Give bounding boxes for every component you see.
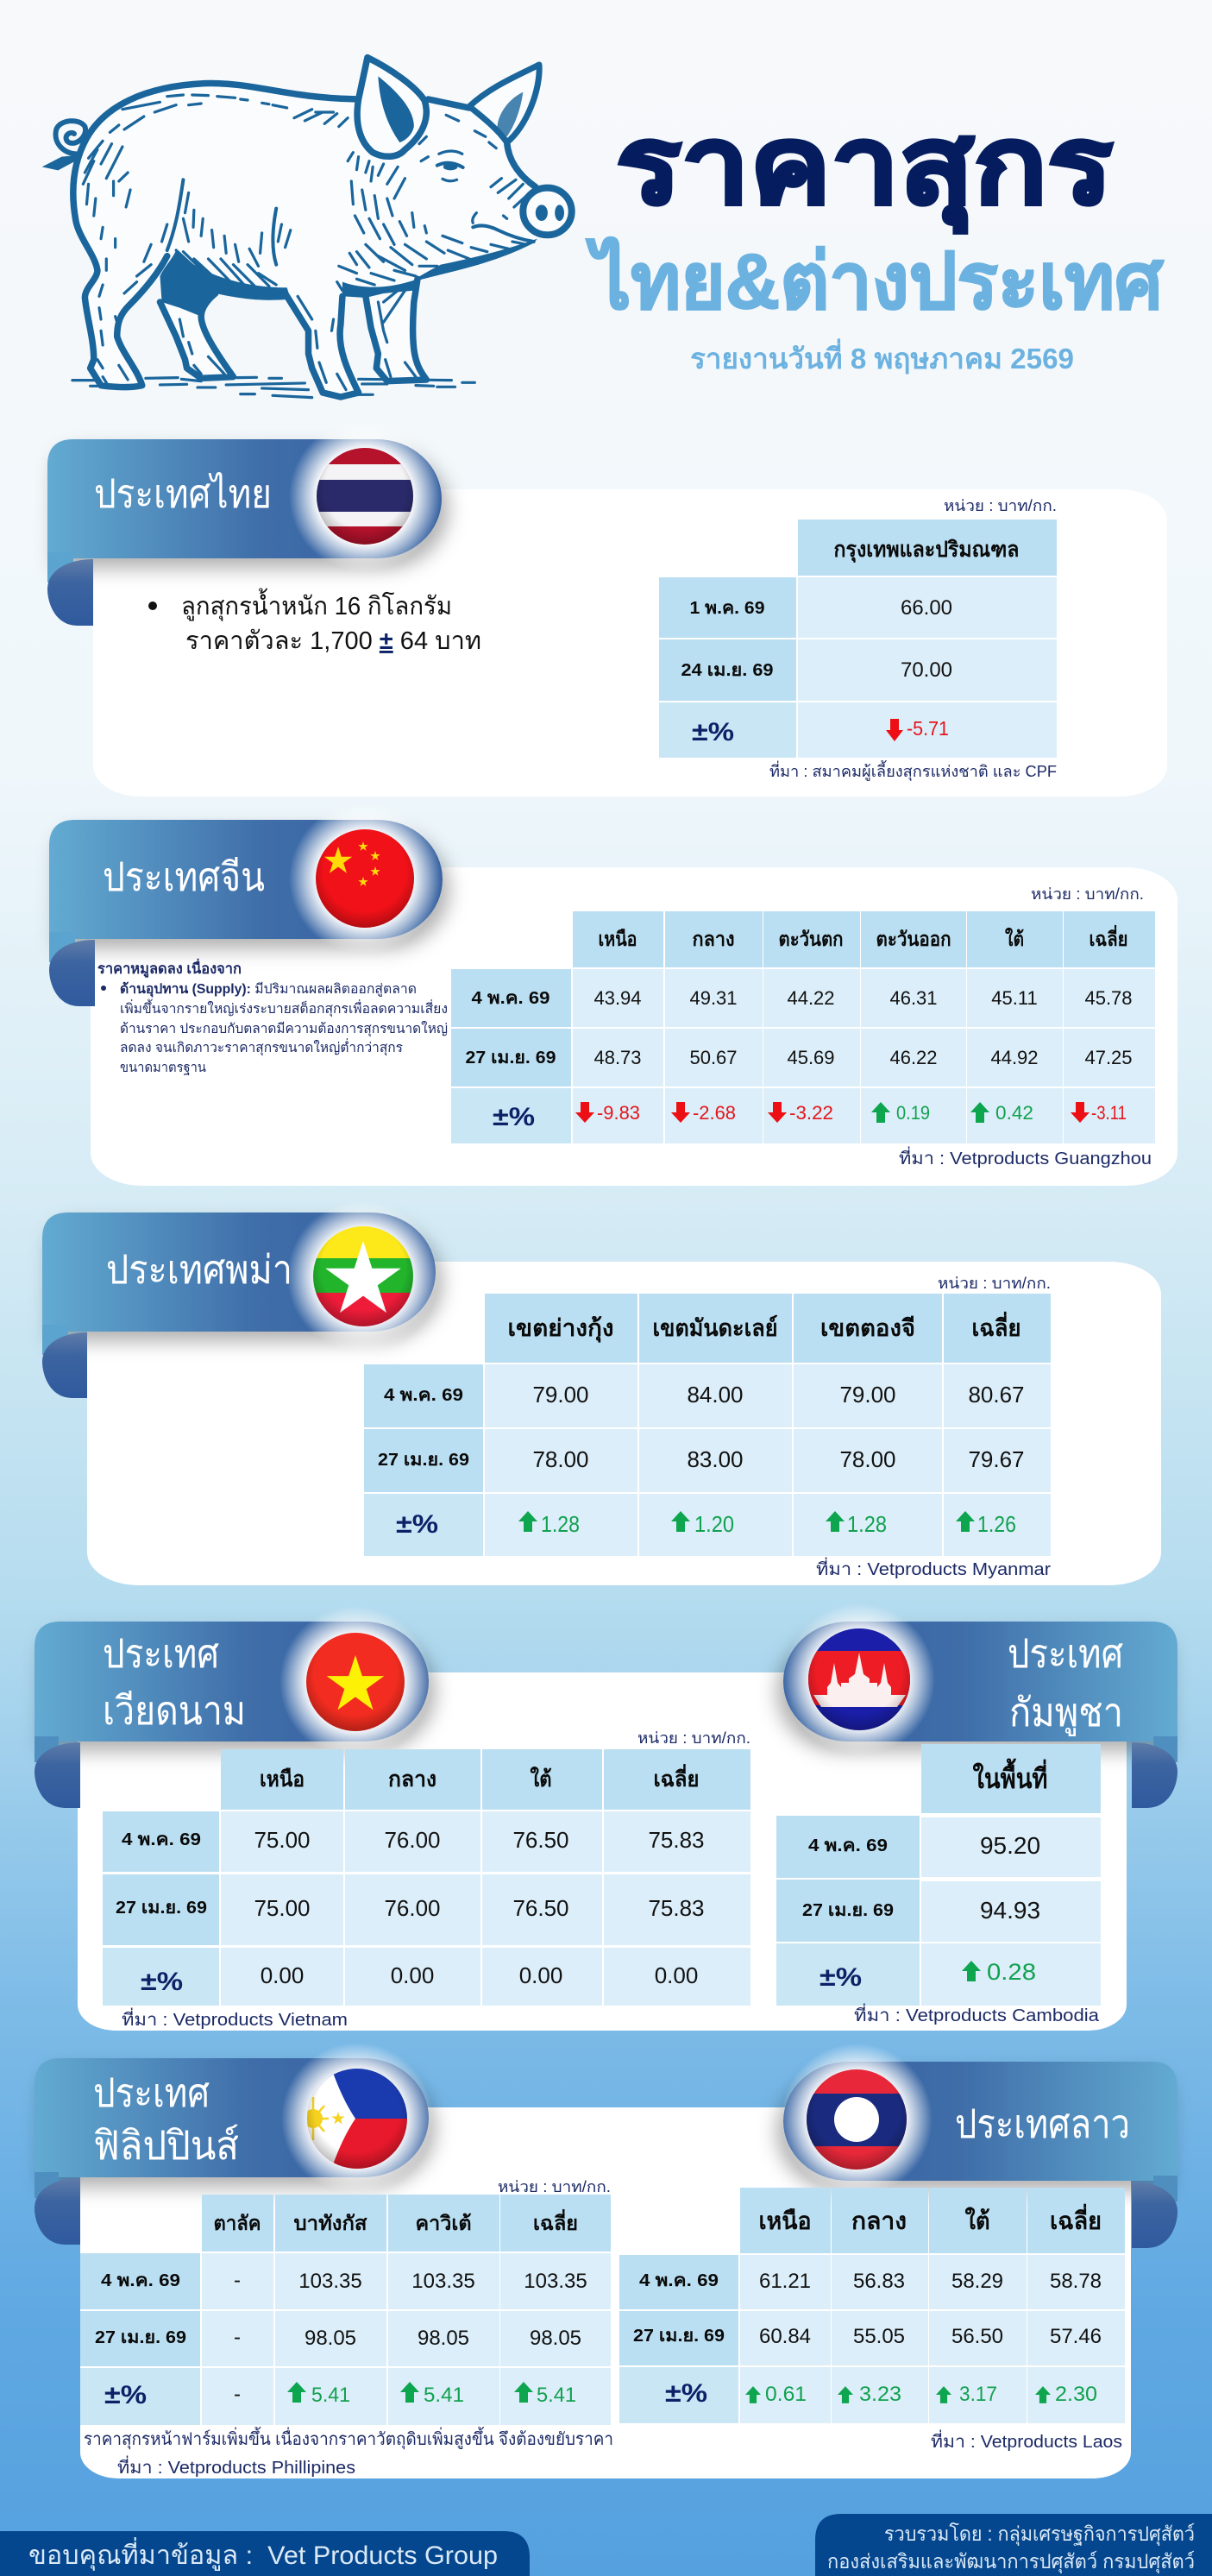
row: percent change [659, 702, 1057, 758]
icon: Philippines flag [307, 2069, 407, 2169]
header row: เหนือ [759, 2208, 811, 2234]
row: 1 May: 1 พ.ค. 69 [690, 599, 764, 618]
source: Cambodia: ที่มา : Vetproducts Cambodia [854, 2003, 1100, 2025]
icon: pig illustration [42, 58, 572, 398]
text block: piglet price: ราคาตัวละ 1,700 ± 64 บาท [185, 627, 481, 655]
row: 27 April: 78.00 [532, 1446, 589, 1472]
text block: reason for price drop: ลดลง จนเกิดภาวะราคาสุกรขนาดใหญ่ต่ำกว่าสุกร [120, 1038, 403, 1056]
panel: Vietnam and Cambodia [35, 1603, 1177, 2031]
source: ที่มา : Vetproducts Guangzhou [899, 1146, 1152, 1168]
unit label: หน่วย : บาท/กก. [944, 497, 1057, 514]
row: percent change: 0.00 [519, 1962, 562, 1988]
icon: Vietnam flag [306, 1633, 405, 1731]
row: 4 May: 76.00 [384, 1827, 441, 1853]
header row: เฉลี่ย [654, 1764, 699, 1792]
header row: เขตตองจี [820, 1315, 915, 1341]
heading banner [49, 820, 443, 939]
row: percent change [451, 1088, 1155, 1143]
row: percent change: ±% [820, 1963, 862, 1992]
row: 4 May: 103.35 [524, 2270, 587, 2293]
ribbon tail: Philippines [35, 2172, 80, 2245]
row: percent change: -3.22 [789, 1102, 833, 1124]
table: Myanmar prices [364, 1294, 1051, 1556]
banner title: Cambodia: ประเทศ [1008, 1631, 1123, 1676]
row: 27 April: 60.84 [759, 2325, 811, 2348]
panel: Philippines and Laos [35, 2043, 1177, 2478]
row: 27 April [776, 1880, 1101, 1942]
row: percent change: 1.28 [541, 1511, 580, 1537]
title: ราคาสุกร [616, 104, 1113, 233]
row: 4 May: 61.21 [759, 2270, 811, 2293]
row: 4 May: 103.35 [298, 2270, 362, 2293]
panel background [87, 1262, 1161, 1585]
banner title: Philippines: ฟิลิปปินส์ [93, 2123, 239, 2168]
unit label: Philippines: หน่วย : บาท/กก. [498, 2178, 611, 2195]
row: percent change: -3.11 [1091, 1102, 1127, 1124]
row: 4 May: - [234, 2269, 241, 2292]
table: Philippines prices [80, 2195, 611, 2425]
row: 4 May: 75.00 [254, 1827, 311, 1853]
row: 4 May: 4 พ.ค. 69 [384, 1386, 463, 1405]
row: percent change: 0.00 [391, 1962, 434, 1988]
ribbon tail [49, 932, 95, 1006]
header row: ตะวันออก [876, 928, 951, 950]
row: 24 April: 70.00 [901, 658, 952, 682]
row: 4 May [776, 1816, 1101, 1878]
header row: ตาลัค [214, 2212, 261, 2234]
header row: ตะวันตก [778, 928, 844, 950]
header row: กลาง [692, 928, 735, 950]
header row [798, 520, 1057, 576]
header row: คาวิเต้ [416, 2212, 471, 2234]
row: 27 April: 45.69 [787, 1047, 835, 1068]
note: Philippines: ราคาสุกรหน้าฟาร์มเพิ่มขึ้น เนื่องจากราคาวัตถุดิบเพิ่มสูงขึ้น จึงต้องขยับราคา [84, 2427, 613, 2450]
header row: เฉลี่ย [1089, 924, 1128, 950]
row: percent change: ±% [493, 1103, 535, 1131]
row: 27 April: 75.83 [648, 1895, 705, 1921]
row: 27 April: 48.73 [593, 1047, 642, 1068]
banner title: Laos: ประเทศลาว [955, 2101, 1130, 2146]
flag glow: Vietnam [279, 1606, 431, 1758]
banner title: Cambodia: กัมพูชา [1009, 1690, 1123, 1736]
row: percent change: ±% [665, 2379, 707, 2408]
table: Thailand prices [659, 520, 1057, 758]
header row: ใต้ [964, 2207, 990, 2234]
row: percent change: 0.00 [261, 1962, 304, 1988]
row: 27 April: 50.67 [689, 1047, 738, 1068]
row: 4 May: 84.00 [687, 1382, 744, 1408]
row: percent change: 0.61 [765, 2383, 807, 2406]
header row: เขตมันดะเลย์ [652, 1314, 778, 1341]
row: 27 April [80, 2311, 611, 2366]
footer: data credit [0, 2531, 530, 2576]
header row [221, 1749, 750, 1810]
row: percent change: 0.28 [987, 1959, 1036, 1985]
panel background [78, 1672, 1127, 2031]
row: 27 April: 79.67 [968, 1446, 1025, 1472]
ribbon tail [47, 552, 93, 626]
text block: reason for price drop: ราคาหมูลดลง เนื่องจาก [97, 958, 242, 979]
row: percent change: 0.19 [896, 1102, 930, 1124]
header row [485, 1294, 1051, 1363]
row: percent change: 3.23 [859, 2383, 901, 2406]
row: percent change: ±% [104, 2381, 147, 2409]
row: 27 April: 27 เม.ย. 69 [95, 2328, 186, 2347]
header row: เหนือ [260, 1767, 305, 1792]
panel background [91, 867, 1177, 1186]
row: 27 April: 55.05 [853, 2325, 905, 2348]
row: 27 April: 76.50 [512, 1895, 569, 1921]
row: percent change: ±% [141, 1968, 183, 1996]
panel background [93, 489, 1167, 797]
row: 24 April: 24 เม.ย. 69 [681, 661, 773, 680]
row: 27 April: 27 เม.ย. 69 [633, 2327, 725, 2346]
banner title: Vietnam [103, 1631, 246, 1733]
row: percent change: 2.30 [1055, 2383, 1097, 2406]
header row: เฉลี่ย [533, 2208, 578, 2234]
footer: compiled by: กองส่งเสริมและพัฒนาการปศุสัตว์ กรมปศุสัตว์ [827, 2550, 1195, 2573]
subtitle: ไทย&ต่างประเทศ [586, 237, 1165, 325]
row: 4 May: 103.35 [411, 2270, 475, 2293]
row: 4 May: 79.00 [839, 1382, 896, 1408]
panel: China [49, 803, 1177, 1186]
row: percent change [103, 1948, 750, 2006]
flag glow: Laos [781, 2044, 933, 2195]
row: 4 May: 4 พ.ค. 69 [101, 2271, 180, 2290]
flag glow: Philippines [281, 2043, 433, 2195]
row: percent change: - [234, 2383, 241, 2406]
header row: เฉลี่ย [1050, 2203, 1102, 2234]
row: 4 May: 79.00 [532, 1382, 589, 1408]
ribbon tail: Cambodia [1132, 1736, 1177, 1808]
row: 4 May: 45.78 [1084, 987, 1133, 1009]
row: 4 May [619, 2255, 1125, 2309]
row: percent change: 1.26 [977, 1511, 1016, 1537]
header row: ใต้ [530, 1766, 552, 1792]
row: 27 April: 98.05 [305, 2327, 356, 2350]
row: 4 May: 80.67 [968, 1382, 1025, 1408]
source: ที่มา : Vetproducts Myanmar [816, 1557, 1051, 1579]
banner title: Vietnam: ประเทศ [103, 1631, 219, 1676]
heading banner: Cambodia [783, 1622, 1177, 1741]
header row [202, 2195, 611, 2252]
heading banner: Laos [783, 2062, 1177, 2181]
title [586, 104, 1165, 325]
row: 27 April: 83.00 [687, 1446, 744, 1472]
table: Vietnam prices [103, 1749, 750, 2006]
source: Philippines: ที่มา : Vetproducts Phillipines [117, 2455, 355, 2478]
unit label: หน่วย : บาท/กก. [1031, 885, 1144, 903]
icon: China flag [316, 829, 414, 928]
ribbon tail [42, 1325, 87, 1398]
row: 27 April: 27 เม.ย. 69 [802, 1901, 894, 1920]
flag glow [289, 803, 441, 954]
row: 4 May: 95.20 [980, 1832, 1040, 1859]
banner title: ประเทศพม่า [106, 1247, 292, 1292]
row: 4 May [80, 2253, 611, 2309]
footer: compiled by [815, 2514, 1212, 2576]
text block: reason for price drop: ด้านอุปทาน (Supply): มีปริมาณผลผลิตออกสู่ตลาด [120, 981, 417, 998]
banner title: Philippines [93, 2070, 239, 2168]
icon: Cambodia flag [808, 1628, 910, 1730]
row: 27 April [364, 1429, 1051, 1492]
icon: Myanmar flag [313, 1226, 413, 1326]
heading banner [42, 1212, 436, 1332]
ribbon tail: Laos [1132, 2176, 1177, 2248]
row: 27 April: 94.93 [980, 1897, 1040, 1924]
banner title: ประเทศจีน [103, 854, 265, 899]
table: China prices [451, 911, 1155, 1143]
header row: กลาง [388, 1767, 436, 1792]
panel: Myanmar [42, 1200, 1161, 1585]
row: 27 April [451, 1029, 1155, 1086]
row: 4 May: 49.31 [689, 987, 738, 1009]
ribbon tail: Vietnam [35, 1736, 80, 1808]
row: percent change: -9.83 [597, 1102, 640, 1124]
row: percent change: 0.42 [995, 1102, 1033, 1124]
unit label: หน่วย : บาท/กก. [938, 1275, 1051, 1292]
row: percent change [364, 1494, 1051, 1556]
flag glow [287, 1200, 439, 1352]
row: percent change: 0.00 [655, 1962, 698, 1988]
row: 4 May: 58.29 [951, 2270, 1003, 2293]
text block: piglet price [148, 588, 481, 655]
row: 4 May: 75.83 [648, 1827, 705, 1853]
row: percent change: 5.41 [424, 2384, 464, 2407]
icon: Thai flag [317, 448, 413, 545]
banner title: Philippines: ประเทศ [93, 2070, 210, 2115]
row: percent change: 1.20 [694, 1511, 734, 1537]
row: 27 April: 56.50 [951, 2325, 1003, 2348]
header row [573, 911, 1155, 967]
row: percent change: ±% [396, 1510, 438, 1539]
row: 4 May: 4 พ.ค. 69 [471, 989, 550, 1008]
row: 4 May: 46.31 [889, 987, 938, 1009]
row: 4 May: 4 พ.ค. 69 [639, 2271, 719, 2290]
row: 27 April: 46.22 [889, 1047, 938, 1068]
table: Laos prices [619, 2188, 1125, 2423]
unit label: Vietnam: หน่วย : บาท/กก. [637, 1729, 750, 1747]
flag glow: Cambodia [783, 1603, 935, 1755]
source: ที่มา : สมาคมผู้เลี้ยงสุกรแห่งชาติ และ CPF [769, 760, 1057, 781]
row: 27 April: - [234, 2326, 241, 2349]
row: percent change: ±% [692, 718, 734, 746]
header row: เหนือ [599, 928, 637, 950]
header row: ใต้ [1005, 927, 1024, 950]
row: 4 May: 43.94 [593, 987, 642, 1009]
text block: reason for price drop [97, 958, 448, 1075]
heading banner: Vietnam [35, 1622, 429, 1741]
text block: reason for price drop: ด้านราคา ประกอบกับตลาดมีความต้องการสุกรขนาดใหญ่ [120, 1021, 448, 1037]
row: 27 April: 98.05 [418, 2327, 469, 2350]
row: 4 May: 4 พ.ค. 69 [808, 1836, 888, 1855]
text block: reason for price drop: ขนาดมาตรฐาน [120, 1061, 206, 1075]
footer: compiled by: รวบรวมโดย : กลุ่มเศรษฐกิจการปศุสัตว์ [884, 2522, 1195, 2546]
row: 27 April: 47.25 [1084, 1047, 1133, 1068]
row: 4 May: 58.78 [1050, 2270, 1102, 2293]
row: 4 May: 4 พ.ค. 69 [122, 1830, 201, 1849]
row: percent change: 5.41 [311, 2384, 350, 2407]
source: Vietnam: ที่มา : Vetproducts Vietnam [122, 2007, 348, 2030]
icon: Laos flag [807, 2069, 907, 2170]
heading banner [47, 439, 442, 558]
panel background [80, 2107, 1131, 2478]
header row [921, 1744, 1101, 1813]
row: percent change: -2.68 [693, 1102, 736, 1124]
row: 27 April: 76.00 [384, 1895, 441, 1921]
row: 27 April [103, 1874, 750, 1945]
row: 4 May: 45.11 [991, 987, 1038, 1009]
row: 27 April: 44.92 [990, 1047, 1039, 1068]
row: 24 April [659, 639, 1057, 701]
header row: กลาง [851, 2208, 907, 2234]
row: percent change: -5.71 [907, 717, 949, 740]
row: percent change [80, 2368, 611, 2425]
row: 4 May: 44.22 [787, 987, 835, 1009]
source: Laos: ที่มา : Vetproducts Laos [931, 2429, 1122, 2452]
banner title: Cambodia [1008, 1631, 1123, 1736]
row: 4 May: 56.83 [853, 2270, 905, 2293]
row: percent change [619, 2367, 1125, 2423]
row: 1 May [659, 577, 1057, 638]
row: 27 April: 75.00 [254, 1895, 311, 1921]
row: percent change: 3.17 [959, 2383, 997, 2406]
panel: Thailand [47, 420, 1167, 797]
row: percent change [776, 1943, 1101, 2006]
text block: reason for price drop: เพิ่มขึ้นจากรายใหญ่เร่งระบายสต็อกสุกรเพื่อลดความเสี่ยง [120, 998, 448, 1017]
heading banner: Philippines [35, 2058, 429, 2177]
footer: data credit: ขอบคุณที่มาข้อมูล : Vet Products Group [28, 2537, 498, 2572]
banner title: ประเทศไทย [94, 471, 272, 516]
row: 27 April: 98.05 [530, 2327, 581, 2350]
row: 27 April: 27 เม.ย. 69 [378, 1451, 469, 1470]
row: 27 April: 27 เม.ย. 69 [466, 1049, 556, 1068]
row: 4 May [364, 1364, 1051, 1427]
text block: piglet price: ลูกสุกรน้ำหนัก 16 กิโลกรัม [181, 588, 452, 621]
row: 4 May [451, 969, 1155, 1027]
flag glow [289, 420, 441, 572]
row: 1 May: 66.00 [901, 596, 952, 620]
row: 27 April: 78.00 [839, 1446, 896, 1472]
row: 27 April: 57.46 [1050, 2325, 1102, 2348]
header row: เฉลี่ย [971, 1311, 1021, 1341]
header row [740, 2188, 1125, 2253]
header row: บาทังกัส [293, 2212, 367, 2234]
row: 4 May: 76.50 [512, 1827, 569, 1853]
table: Cambodia prices [776, 1744, 1101, 2006]
row: 27 April: 27 เม.ย. 69 [116, 1899, 207, 1918]
row: 27 April [619, 2311, 1125, 2365]
header row: เขตย่างกุ้ง [507, 1315, 614, 1343]
row: percent change: 5.41 [537, 2384, 576, 2407]
row: percent change: 1.28 [847, 1511, 887, 1537]
report date: รายงานวันที่ 8 พฤษภาคม 2569 [690, 338, 1074, 375]
header row: กรุงเทพและปริมณฑล [833, 538, 1020, 564]
row: 4 May [103, 1811, 750, 1872]
banner title: Vietnam: เวียดนาม [103, 1688, 246, 1733]
header row: ในพื้นที่ [973, 1758, 1047, 1794]
